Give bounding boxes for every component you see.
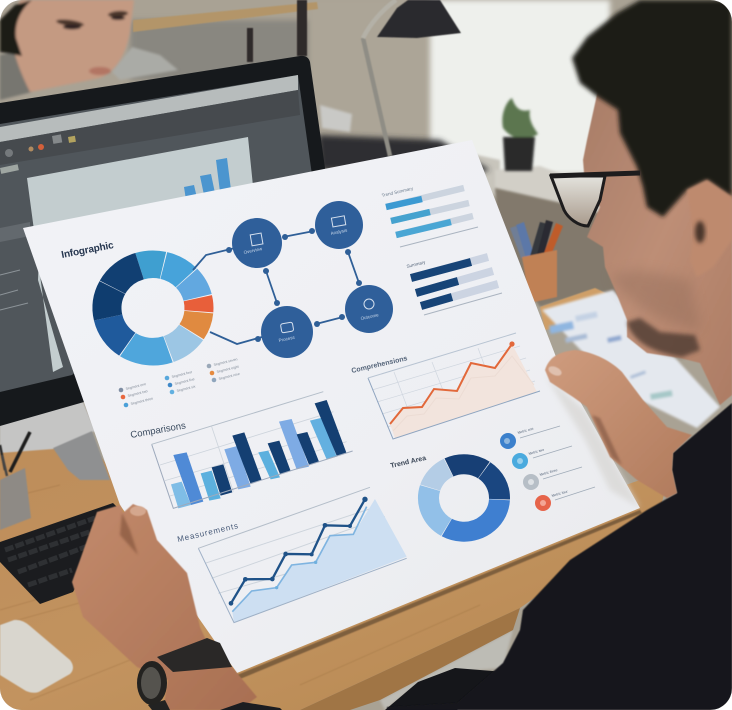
bar chart	[130, 392, 353, 508]
donut legend: Segment five	[174, 377, 195, 386]
monitor stand	[0, 400, 110, 480]
donut legend: Segment six	[176, 384, 196, 393]
icon list: Metric four	[551, 489, 569, 498]
wristwatch	[137, 638, 232, 710]
flow node 4: Outcome	[360, 312, 380, 321]
donut legend: Segment eight	[216, 365, 239, 374]
sheet shadow	[237, 510, 642, 679]
cheek stubble shade	[610, 270, 700, 330]
papers on the desk	[542, 290, 720, 428]
progress bars: light blue	[381, 186, 478, 247]
sheet title: Infographic	[60, 240, 115, 261]
potted plant	[502, 98, 538, 171]
man's shirt	[387, 403, 732, 710]
measurements area chart	[176, 487, 407, 623]
glasses	[550, 173, 640, 226]
orange line chart: Comprehensions	[351, 355, 408, 375]
donut legend: Segment seven	[213, 357, 238, 367]
keyboard	[0, 503, 120, 604]
orange line chart	[351, 333, 540, 439]
flow node 3: Process	[278, 335, 296, 343]
measurements area chart: Measurements	[176, 521, 239, 544]
left hand holding sheet	[72, 504, 257, 710]
flow node 4	[345, 285, 393, 333]
infographic sheet	[23, 140, 642, 679]
donut legend: Segment one	[125, 382, 146, 391]
desk grain	[0, 485, 640, 700]
donut legend: Segment nine	[218, 372, 240, 381]
flow node 1: Overview	[243, 246, 263, 255]
progress bars: navy	[406, 257, 502, 315]
bar chart: Comparisons	[130, 420, 187, 441]
inner ear	[695, 221, 705, 243]
desk front edge and floor	[300, 608, 520, 710]
ear	[687, 180, 732, 277]
large donut chart	[88, 246, 218, 370]
progress bars: light blue: Trend Summary	[381, 186, 414, 198]
hair	[572, 0, 732, 217]
icon list: Metric three	[539, 468, 558, 477]
icon list	[500, 426, 595, 511]
left sleeve	[220, 702, 282, 710]
pencil cup	[510, 220, 563, 303]
mouse	[0, 620, 73, 693]
flow node 1	[232, 218, 282, 268]
progress bars: navy: Summary	[406, 259, 427, 269]
icon list: Metric two	[528, 448, 545, 456]
small donut chart	[415, 451, 513, 545]
pen holder	[0, 432, 31, 530]
trend title: Trend Area	[390, 455, 427, 470]
donut legend	[119, 357, 240, 407]
donut legend: Segment two	[127, 389, 148, 398]
woman in the background	[0, 0, 178, 100]
donut legend: Segment three	[130, 397, 154, 406]
flow node 2: Analysis	[330, 227, 348, 236]
desk lamp	[363, 0, 461, 156]
computer monitor	[0, 56, 326, 480]
beard stubble	[627, 318, 700, 357]
flow node 2	[315, 201, 363, 249]
flow node 3	[261, 306, 313, 358]
flow connectors	[193, 228, 362, 344]
icon list: Metric one	[517, 427, 534, 435]
man's head	[550, 0, 732, 405]
neck and face	[583, 90, 732, 405]
donut legend: Segment four	[171, 370, 193, 379]
desk surface	[0, 440, 665, 710]
right hand holding sheet	[545, 350, 692, 498]
